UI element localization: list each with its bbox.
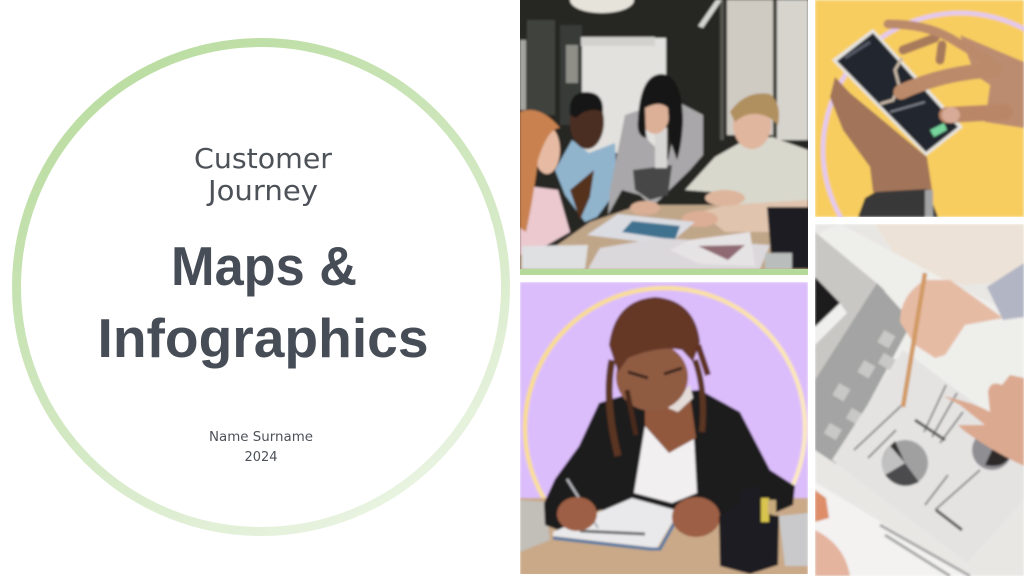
second pie chart <box>972 430 1012 470</box>
second finger behind phone <box>903 38 935 50</box>
thumb <box>947 112 1005 115</box>
grey paper <box>815 283 912 464</box>
table <box>520 205 808 275</box>
laptop <box>520 500 550 552</box>
right notebook <box>779 513 808 566</box>
top finger <box>882 18 968 54</box>
ceiling lamp <box>570 0 634 13</box>
subtitle: Journey <box>206 175 318 207</box>
person: standing woman in grey blazer <box>608 103 703 215</box>
main heading <box>98 235 428 369</box>
phone <box>832 29 963 156</box>
green strip under team photo <box>520 269 808 275</box>
index finger <box>901 70 995 92</box>
tablet screen <box>815 277 840 327</box>
flip-chart whiteboard <box>582 38 666 153</box>
neck <box>645 395 696 453</box>
hand holding pencil <box>900 280 1003 358</box>
lilac ring <box>819 9 1024 217</box>
author and year: Name Surname <box>209 429 313 445</box>
pencil <box>903 273 925 407</box>
striped sleeve <box>987 263 1024 320</box>
phone chart line <box>880 58 902 104</box>
blazer <box>544 390 795 530</box>
author and year <box>209 429 313 465</box>
white top <box>634 426 697 503</box>
percentage columns <box>915 420 962 530</box>
photo: hands holding a smartphone <box>815 0 1024 217</box>
person: blond man in light shirt <box>685 137 808 210</box>
subtitle <box>194 143 333 207</box>
blue chart paper <box>587 214 695 245</box>
author and year: 2024 <box>244 449 278 465</box>
person: man in blue shirt <box>555 140 617 222</box>
person: red-haired woman <box>520 185 570 262</box>
pen <box>567 479 598 528</box>
report text rows <box>854 385 980 510</box>
hands <box>557 497 597 531</box>
main heading: Maps & <box>171 235 357 297</box>
photo: team meeting around a table <box>515 0 815 275</box>
subtitle: Customer <box>194 143 333 175</box>
lower papers <box>815 482 970 576</box>
white report sheet <box>832 350 1024 563</box>
papers on table <box>522 245 588 269</box>
wristwatch <box>858 189 938 217</box>
right hand palm <box>960 35 1024 128</box>
pen holder <box>718 514 780 574</box>
notebook <box>553 498 679 548</box>
photo: hands over printed pie chart reports <box>815 224 1024 576</box>
main heading: Infographics <box>98 307 428 369</box>
title panel: circle with text <box>16 42 506 532</box>
photo: woman writing in a notebook <box>520 282 808 576</box>
laptop <box>767 207 808 269</box>
hair and braids <box>609 297 700 372</box>
face <box>616 343 688 411</box>
grey tablet edge <box>815 232 885 379</box>
hand pointing <box>943 375 1024 466</box>
blurred background <box>875 224 1024 285</box>
yellow ring <box>522 284 808 500</box>
gradient ring <box>16 42 506 532</box>
desk <box>520 498 808 576</box>
pie chart <box>882 440 928 486</box>
left hand <box>830 77 932 192</box>
